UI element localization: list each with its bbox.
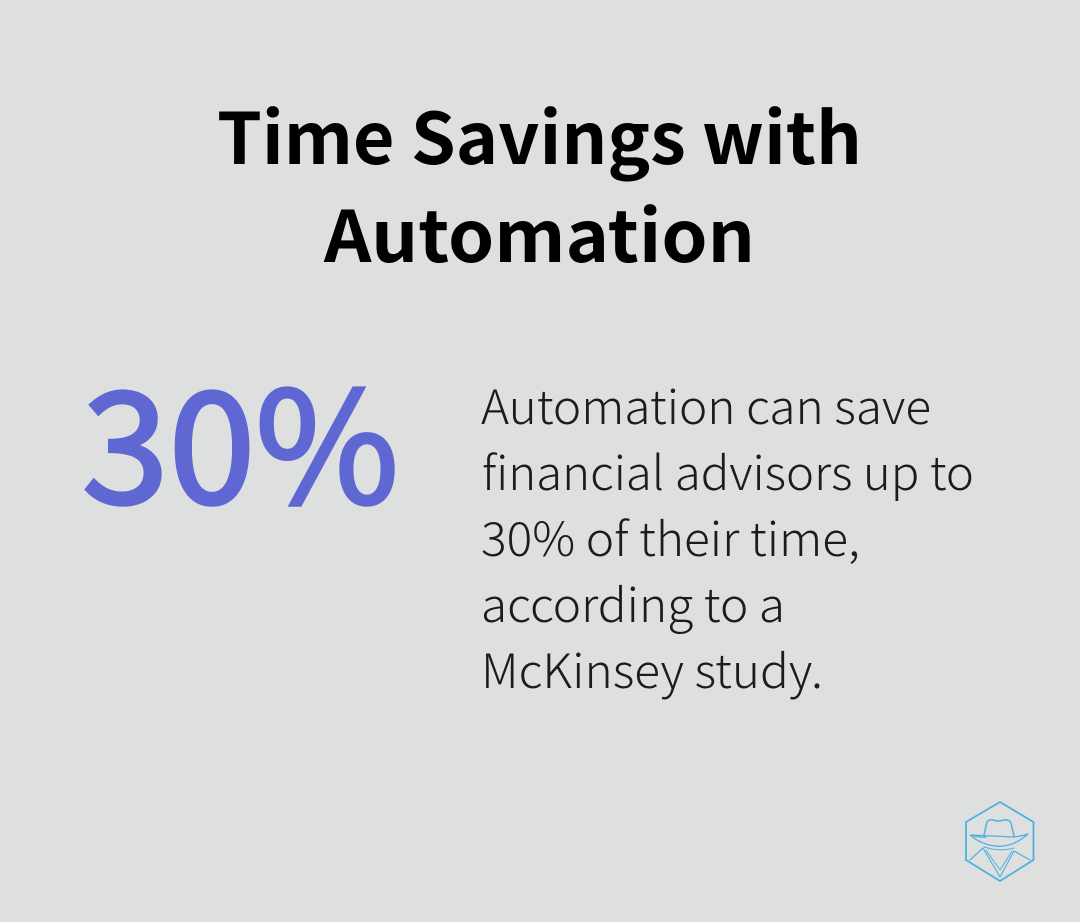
title: Time Savings with [217, 83, 862, 185]
icon: hexagon logo with hat and mask [966, 802, 1034, 881]
description text: financial advisors up to [482, 435, 974, 504]
title [217, 83, 862, 283]
big stat: 30%: 30% [82, 325, 399, 548]
description text: 30% of their time, [481, 501, 860, 570]
description text: according to a [481, 567, 785, 636]
description text: Automation can save [481, 369, 931, 438]
title: Automation [323, 181, 755, 283]
description text: McKinsey study. [481, 633, 823, 702]
description text [481, 369, 974, 702]
